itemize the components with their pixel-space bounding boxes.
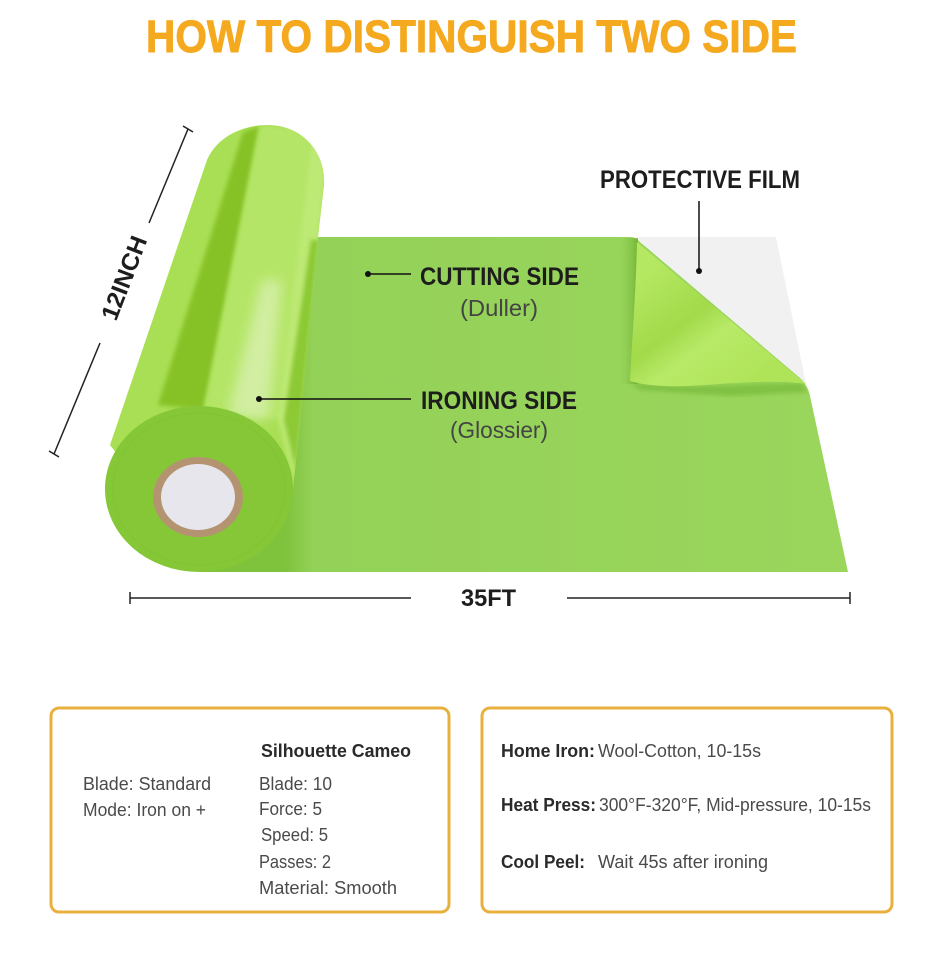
callout: cutting side: CUTTING SIDE: [420, 263, 579, 291]
callout: protective film: PROTECTIVE FILM: [600, 166, 800, 194]
callout: cutting side: [365, 263, 579, 321]
vinyl roll: [105, 125, 326, 572]
protective film: [636, 237, 806, 384]
callout: ironing side: IRONING SIDE: [421, 387, 577, 415]
panel: cutting settings: Silhouette Cameo: [261, 741, 411, 761]
callout: ironing side: (Glossier): [450, 417, 548, 443]
core hole: [161, 464, 235, 530]
panel: cutting settings: Blade: Standard: [83, 774, 211, 794]
panel: cutting settings: Passes: 2: [259, 852, 331, 872]
folded corner: [630, 242, 806, 386]
panel: pressing instructions: Wait 45s after ironing: [598, 852, 768, 872]
panel: pressing instructions: Home Iron:: [501, 741, 595, 761]
35ft dimension: 35FT: [461, 585, 516, 612]
callout: ironing side: [256, 387, 577, 443]
12 inch dimension: [49, 126, 193, 457]
callout: cutting side: (Duller): [460, 295, 538, 321]
panel: pressing instructions: 300°F-320°F, Mid-pressure, 10-15s: [599, 795, 871, 815]
panel: pressing instructions: Heat Press:: [501, 795, 596, 815]
panel: cutting settings: Speed: 5: [261, 825, 328, 845]
panel: cutting settings: Force: 5: [259, 799, 322, 819]
panel: cutting settings: Blade: 10: [259, 774, 332, 794]
panel: pressing instructions: [482, 708, 892, 912]
panel: cutting settings: [51, 708, 449, 912]
12 inch dimension: 12INCH: [96, 232, 153, 324]
title: HOW TO DISTINGUISH TWO SIDE: [146, 11, 797, 62]
panel: pressing instructions: Wool-Cotton, 10-15s: [598, 741, 761, 761]
vinyl sheet: [200, 237, 848, 572]
cardboard core: [153, 457, 243, 537]
panel: cutting settings: Material: Smooth: [259, 878, 397, 898]
roll end face: [105, 406, 293, 572]
callout: protective film: [600, 166, 800, 274]
panel: cutting settings: Mode: Iron on +: [83, 800, 206, 820]
panel: pressing instructions: Cool Peel:: [501, 852, 585, 872]
